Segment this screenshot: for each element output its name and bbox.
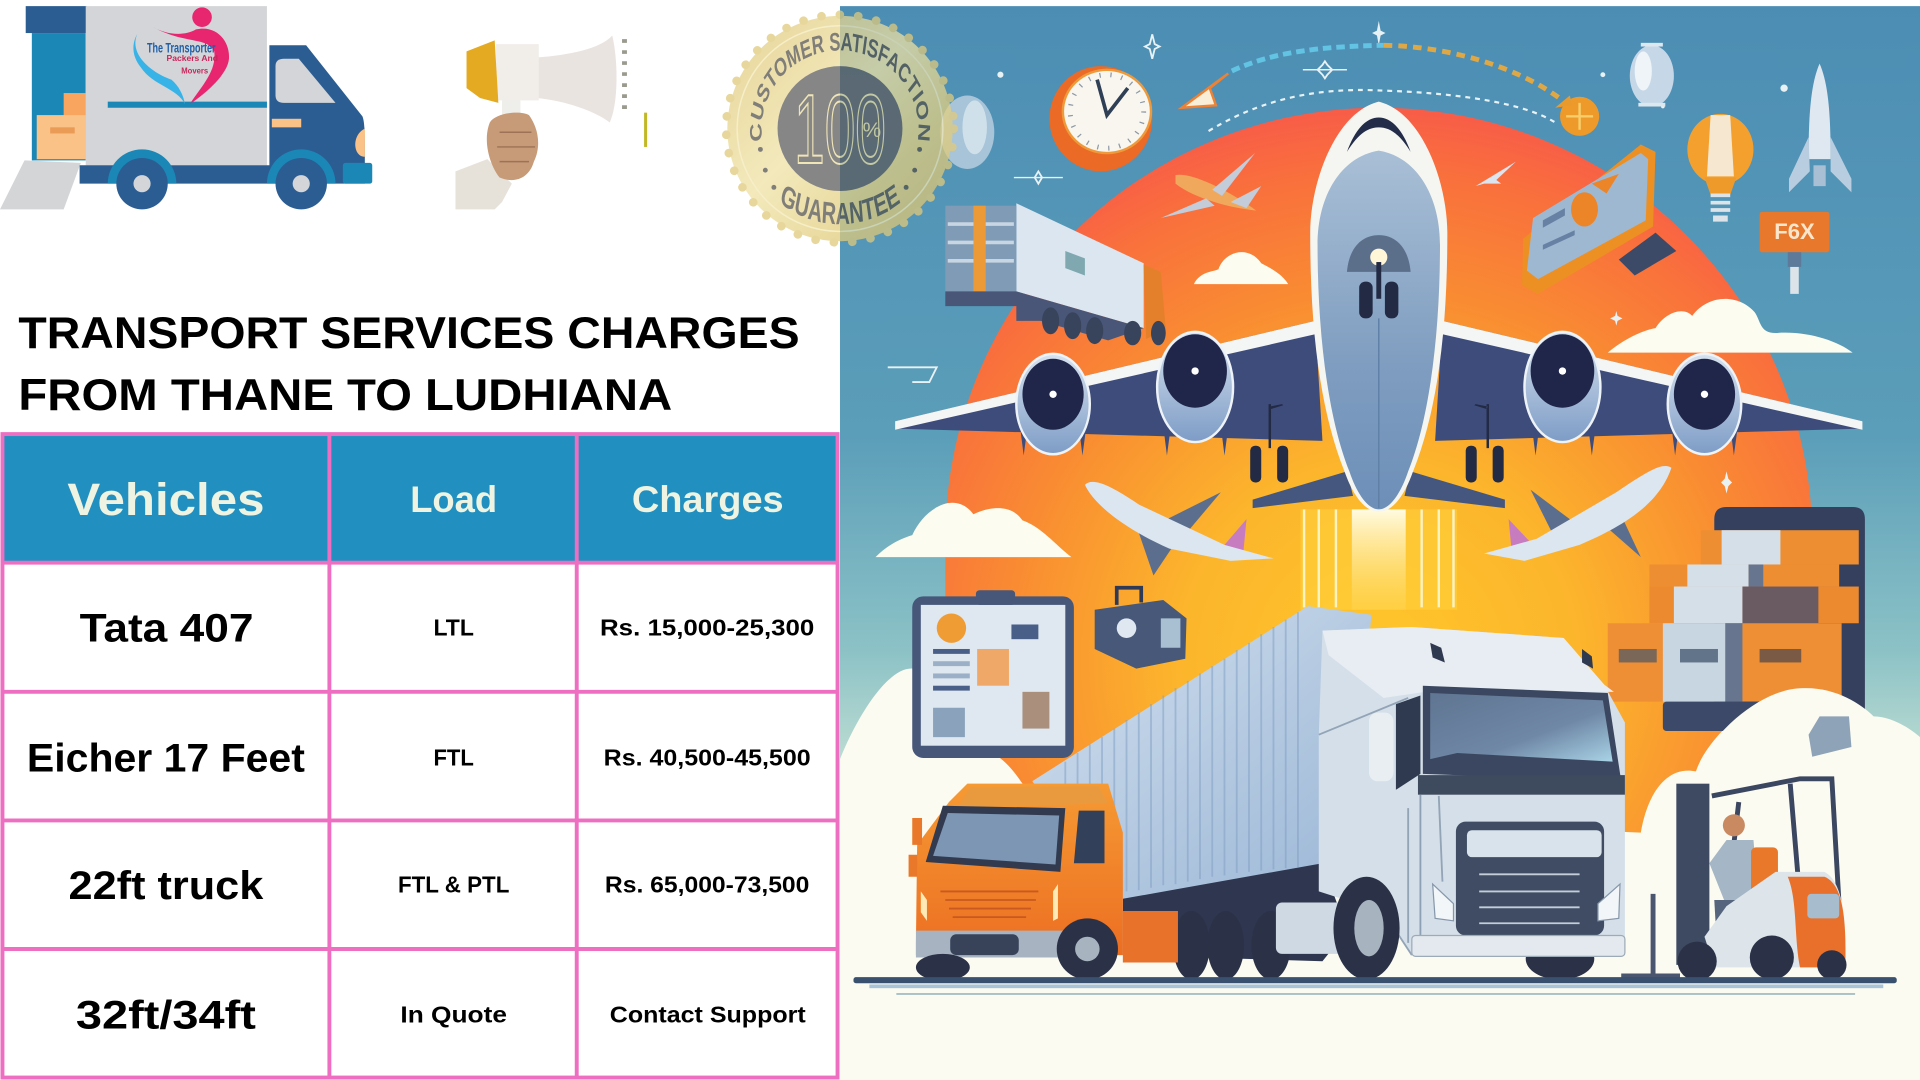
fuselage belly — [1318, 151, 1440, 509]
logo heart — [153, 27, 229, 104]
header: load: Load — [410, 479, 497, 520]
row: Tata 407: Rs. 15,000-25,300 — [600, 615, 814, 641]
icon: rocket — [1789, 64, 1851, 192]
small plane left — [1085, 482, 1273, 576]
row: Eicher 17 Feet: FTL — [433, 744, 474, 770]
logo text — [147, 41, 218, 75]
cockpit — [1347, 118, 1411, 152]
sky background — [840, 6, 1920, 1080]
panel: charges table — [2, 433, 838, 1078]
horn — [536, 36, 617, 122]
seal number: 100 — [794, 74, 886, 184]
yellow ring — [467, 40, 498, 103]
light beams — [1300, 509, 1457, 610]
engines — [1016, 332, 1741, 454]
body — [496, 44, 539, 100]
icon: clock — [1049, 66, 1152, 171]
body — [1704, 872, 1846, 967]
door window — [1074, 811, 1104, 863]
table header band — [2, 433, 838, 562]
orange rear — [1788, 877, 1846, 967]
row 4 — [1608, 623, 1842, 702]
cab — [1319, 627, 1625, 955]
icon: bag — [1095, 588, 1187, 669]
row: Eicher 17 Feet: Rs. 40,500-45,500 — [604, 744, 811, 770]
roof visor — [958, 786, 1108, 808]
grille — [950, 934, 1019, 955]
cloud at container base — [1696, 688, 1873, 796]
door and panel seams — [1319, 698, 1442, 955]
heading line 1: TRANSPORT SERVICES CHARGES — [18, 309, 800, 358]
row: 32ft/34ft: In Quote — [400, 1001, 507, 1027]
fuselage — [1310, 102, 1447, 512]
trailer ribs — [1065, 612, 1298, 891]
bumper — [1412, 936, 1625, 956]
bumper — [916, 931, 1065, 958]
small plane right — [1484, 466, 1671, 561]
heading line 2: FROM THANE TO LUDHIANA — [18, 371, 672, 420]
right wing — [1435, 321, 1862, 441]
row: Eicher 17 Feet — [27, 736, 811, 780]
rear wheels — [1173, 911, 1594, 980]
row: 22ft truck: FTL & PTL — [398, 872, 509, 898]
grille lines — [940, 891, 1038, 917]
handle — [502, 98, 520, 120]
row: 22ft truck — [69, 864, 809, 908]
dots — [622, 39, 626, 113]
transporter logo — [133, 7, 229, 104]
tailplane — [1253, 471, 1505, 508]
hand — [487, 113, 538, 180]
logo hand — [133, 34, 185, 104]
logo text: Movers — [181, 65, 208, 75]
row: 32ft/34ft: Contact Support — [610, 1001, 806, 1027]
visor band — [1418, 775, 1625, 795]
trailer rear — [945, 206, 1016, 294]
road — [853, 977, 1897, 995]
row: Tata 407: Tata 407 — [80, 607, 253, 651]
small orange plane — [1161, 153, 1261, 218]
boxes — [37, 93, 86, 159]
door handle — [272, 119, 301, 127]
cargo bay — [32, 33, 86, 160]
container stack — [1608, 507, 1865, 731]
big truck — [1032, 606, 1625, 980]
sleeve — [456, 159, 512, 209]
orange truck — [909, 784, 1178, 981]
table header labels — [67, 474, 784, 525]
icon: guarantee seal — [722, 10, 958, 247]
row: 22ft truck: Rs. 65,000-73,500 — [605, 872, 809, 898]
orange cab — [916, 784, 1123, 955]
seal bottom text: GUARANTEE — [782, 184, 900, 224]
header: charges: Charges — [632, 479, 784, 520]
small white plane — [1476, 162, 1516, 186]
icon: printer — [1809, 716, 1851, 757]
icon: sign: F6X — [1774, 219, 1815, 244]
icon: tablet — [1522, 144, 1676, 294]
row 1 — [1701, 530, 1859, 564]
icon: megaphone — [456, 36, 647, 209]
fork mast — [1676, 784, 1709, 965]
engine fins — [1019, 416, 1739, 456]
finger lines — [497, 132, 535, 162]
right wing edge — [1442, 321, 1862, 430]
wheels — [108, 149, 336, 209]
windshield — [1423, 686, 1621, 781]
delivery truck logo — [0, 6, 372, 209]
ground clouds — [840, 669, 1920, 1080]
row: Eicher 17 Feet: Eicher 17 Feet — [27, 736, 305, 780]
table grid — [2, 433, 838, 1078]
logo text: Packers And — [167, 53, 218, 63]
box body — [86, 6, 267, 165]
trailer panels — [948, 224, 1014, 261]
glass — [1430, 693, 1613, 762]
tractor cab — [1144, 264, 1166, 339]
forklift — [1621, 779, 1847, 981]
row: 22ft truck: 22ft truck — [69, 864, 264, 908]
fuel tank — [1276, 902, 1344, 954]
main gear — [1250, 404, 1504, 482]
bumper — [343, 163, 372, 184]
row: 32ft/34ft — [76, 994, 806, 1038]
wheels — [1042, 307, 1166, 345]
headlights — [1433, 884, 1620, 921]
sun disc — [945, 108, 1812, 857]
nose gear and lamp — [1347, 235, 1411, 318]
icon: coin — [1555, 96, 1599, 136]
row 3 — [1649, 587, 1859, 623]
side body — [1123, 911, 1178, 962]
fork tines — [1621, 894, 1680, 978]
wheels — [1678, 936, 1847, 981]
seal dots — [758, 147, 922, 190]
left wing — [895, 321, 1322, 441]
heading — [18, 309, 800, 420]
seal percent: % — [863, 119, 881, 142]
seal disc — [726, 15, 954, 242]
mirrors — [909, 818, 922, 877]
roof lamps — [1430, 643, 1593, 669]
panel: illustration — [840, 6, 1920, 1080]
logo text: The Transporter — [147, 41, 216, 56]
upper trailer truck — [945, 203, 1166, 345]
clipboard — [912, 590, 1074, 758]
logo head — [192, 7, 212, 27]
headlight — [355, 129, 365, 157]
icon: egg ornament — [1630, 43, 1674, 107]
roof cage — [1712, 779, 1839, 906]
icon: globe ornament — [940, 96, 994, 169]
roof block — [26, 6, 87, 33]
headlamps — [921, 884, 1058, 921]
icon: arrow — [1182, 73, 1228, 108]
dashed flight arcs — [1209, 45, 1562, 131]
row: 32ft/34ft: 32ft/34ft — [76, 994, 256, 1038]
centre line — [1378, 318, 1380, 508]
left wing edge — [895, 321, 1315, 430]
window — [1807, 894, 1839, 918]
row: Tata 407: LTL — [433, 615, 474, 641]
trailer straps — [973, 206, 986, 294]
grille — [1456, 822, 1604, 936]
header: vehicles: Vehicles — [67, 474, 264, 525]
row: Tata 407 — [80, 607, 814, 651]
seal top text: CUSTOMER SATISFACTION — [750, 32, 930, 141]
front wheel — [1333, 877, 1400, 980]
wheels — [916, 918, 1118, 981]
pallet — [1663, 702, 1784, 731]
icon: sign — [1760, 212, 1829, 294]
ramp — [0, 160, 81, 209]
cab window — [276, 59, 336, 103]
decorative sparkles — [888, 21, 1788, 493]
chassis — [1123, 863, 1347, 961]
seat — [1751, 847, 1778, 902]
main plane — [895, 102, 1862, 512]
row 2 — [1649, 564, 1839, 587]
trailer — [1032, 606, 1371, 899]
cloud left — [876, 503, 1071, 557]
trailer side — [1016, 203, 1144, 328]
small cloud centre — [1194, 252, 1288, 284]
cab — [80, 45, 365, 184]
icon: light bulb — [1687, 114, 1753, 222]
stripe — [108, 102, 267, 108]
olive arc — [644, 113, 647, 147]
driver — [1709, 814, 1758, 943]
side mirror and door — [1369, 696, 1420, 943]
logo patch — [1065, 251, 1085, 276]
inner circle — [778, 66, 902, 191]
rack frame — [1714, 507, 1865, 709]
chassis — [945, 291, 1144, 340]
cloud right — [1608, 299, 1853, 353]
glass — [933, 813, 1059, 864]
cab roof — [1322, 627, 1614, 698]
windshield — [926, 806, 1065, 872]
